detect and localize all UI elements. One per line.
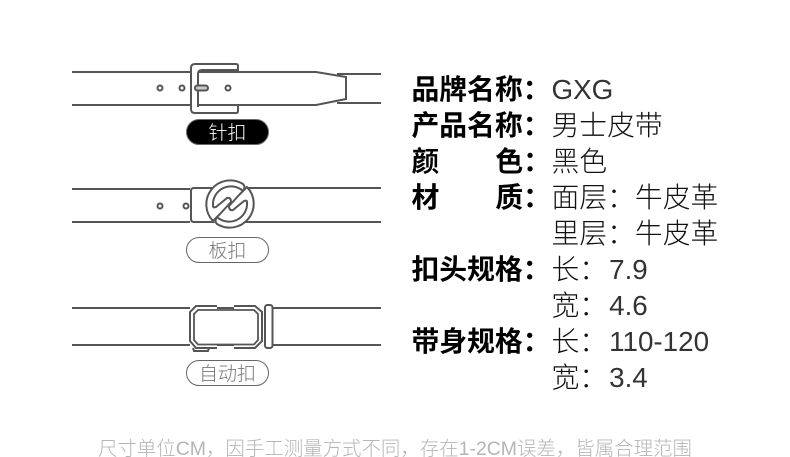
spec: belt length: 长：110-120 [552, 326, 709, 357]
icon: automatic buckle belt [72, 305, 381, 351]
spec: colour: 黑色 [552, 146, 607, 177]
spec: material inner: 里层：牛皮革 [552, 218, 718, 249]
spec: belt width: 宽：3.4 [552, 362, 648, 393]
spec: colour: 颜 色： [412, 146, 551, 177]
spec: brand name: 品牌名称： [412, 74, 550, 105]
label: automatic buckle: 自动扣 [199, 359, 256, 386]
spec: buckle length [412, 254, 648, 285]
spec: product name [412, 110, 663, 141]
label: plate buckle [186, 237, 269, 263]
spec: product name: 男士皮带 [552, 110, 663, 141]
label: pin buckle [186, 119, 269, 145]
icon: plate buckle belt [72, 180, 381, 228]
spec: belt length: 带身规格： [412, 326, 550, 357]
spec: brand name: GXG [552, 74, 613, 105]
spec: buckle length: 长：7.9 [552, 254, 648, 285]
spec: brand name [412, 74, 613, 105]
spec: material outer: 材 质： [412, 182, 551, 213]
spec: product name: 产品名称： [412, 110, 550, 141]
spec: material outer [412, 182, 718, 213]
spec: belt length [412, 326, 709, 357]
icon: pin buckle belt [72, 64, 381, 113]
label: pin buckle: 针扣 [208, 118, 246, 145]
label: plate buckle: 板扣 [208, 236, 246, 263]
label: automatic buckle [186, 360, 269, 386]
spec: material outer: 面层：牛皮革 [552, 182, 718, 213]
spec: buckle length: 扣头规格： [412, 254, 550, 285]
spec: buckle width: 宽：4.6 [552, 290, 648, 321]
